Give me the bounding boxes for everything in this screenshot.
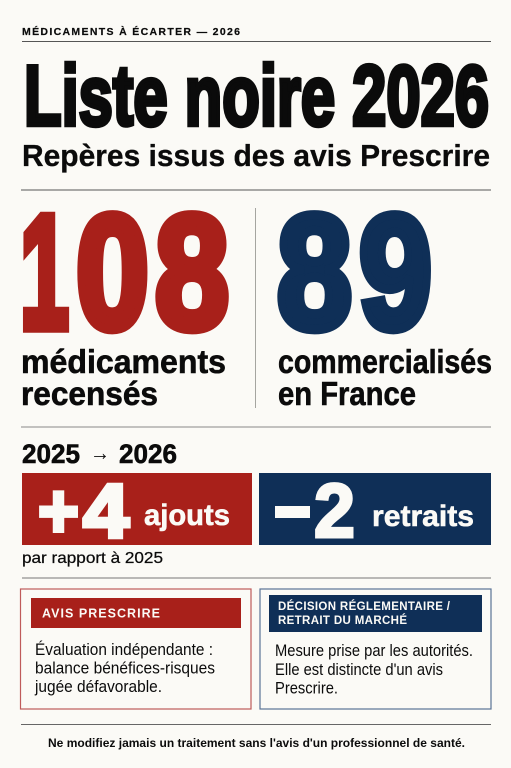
minus sign <box>275 506 310 518</box>
label: commercialisés en France: en France <box>278 375 416 412</box>
footer warning: Ne modifiez jamais un traitement sans l'avis d'un professionnel de santé. <box>48 736 465 750</box>
big number 108: 0 <box>76 182 149 363</box>
panel heading: AVIS PRESCRIRE <box>42 606 160 620</box>
panel body text: Évaluation indépendante : <box>35 640 213 659</box>
heading: 2025 to 2026: → <box>90 440 110 465</box>
label: ajouts: ajouts <box>144 499 230 532</box>
panel: regulatory decision <box>260 589 491 709</box>
panel body text: Prescrire. <box>275 680 338 698</box>
big number 89 <box>277 182 432 363</box>
big number 108 <box>20 182 229 363</box>
panel: avis Prescrire <box>20 589 251 709</box>
label: médicaments recensés: recensés <box>21 375 158 412</box>
big number 108: 8 <box>155 182 229 363</box>
comparison note: par rapport à 2025 <box>22 550 163 567</box>
panel: 89 marketed <box>277 182 492 412</box>
panel: additions <box>22 469 252 554</box>
panel body text: Elle est distincte d'un avis <box>275 661 443 679</box>
panel heading: RETRAIT DU MARCHÉ <box>278 614 407 627</box>
header kicker: MÉDICAMENTS À ÉCARTER — 2026 <box>22 25 240 38</box>
panel body text <box>34 640 215 696</box>
panel heading: DÉCISION RÉGLEMENTAIRE / <box>278 600 451 613</box>
big number 108: 1 <box>20 182 69 363</box>
panel body text <box>275 642 473 698</box>
panel heading <box>269 595 482 632</box>
panel body text: Mesure prise par les autorités. <box>275 642 473 660</box>
label: médicaments recensés: médicaments <box>21 343 226 380</box>
number +4: 4 <box>83 469 129 554</box>
heading: 2025 to 2026: 2025 <box>22 439 80 469</box>
subtitle: Repères issus des avis Prescrire <box>22 138 490 173</box>
big number 89: 8 <box>277 182 352 363</box>
number 2: 2 <box>314 469 355 554</box>
panel: withdrawals <box>259 469 491 554</box>
heading: 2025 to 2026: 2026 <box>119 439 177 469</box>
label: retraits: retraits <box>372 500 474 533</box>
number +4 <box>38 469 129 554</box>
label: commercialisés en France <box>278 343 492 412</box>
panel body text: jugée défavorable. <box>34 678 162 696</box>
panel body text: balance bénéfices-risques <box>35 660 215 678</box>
label: médicaments recensés <box>21 343 226 412</box>
number +4: + <box>38 469 79 554</box>
big number 89: 9 <box>359 182 432 363</box>
heading: 2025 to 2026 <box>22 439 177 469</box>
panel: 108 medicines <box>20 182 229 412</box>
panel heading <box>31 598 241 628</box>
